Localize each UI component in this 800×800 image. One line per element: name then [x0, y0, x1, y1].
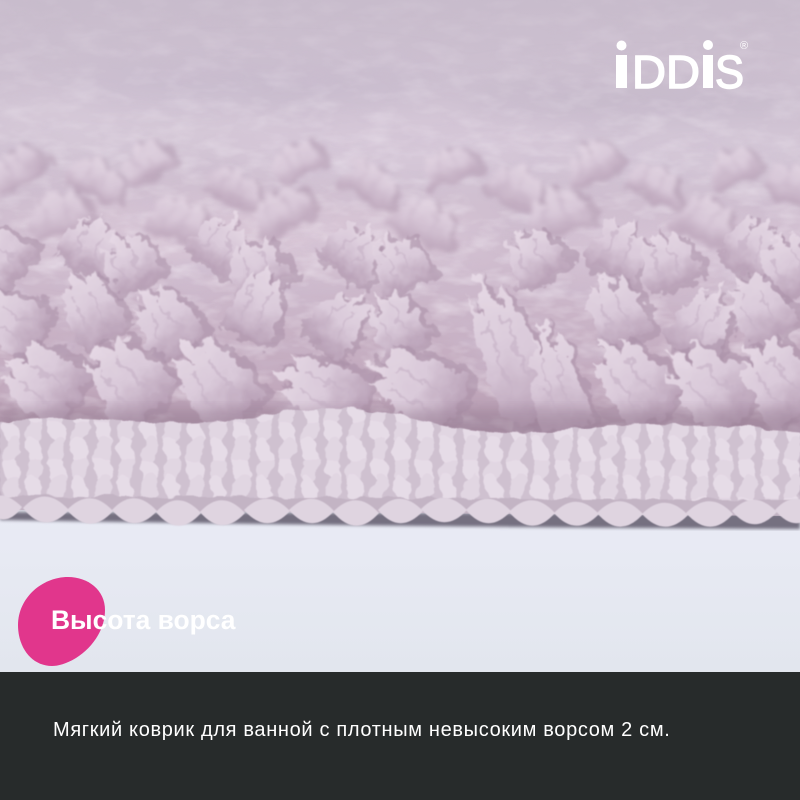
- stitched bead edge: [0, 496, 800, 527]
- description text: Мягкий коврик для ванной с плотным невысоким ворсом 2 см.: [53, 719, 670, 741]
- logo: IDDIS: [616, 40, 748, 92]
- heading: Высота ворса: [51, 605, 235, 635]
- woven rope border: [0, 408, 800, 516]
- soft fibre mottling: [0, 76, 800, 434]
- pile bottom shadow: [0, 410, 800, 440]
- logo: IDDIS: ®: [740, 40, 748, 52]
- footer bar: [0, 672, 800, 800]
- floor contact shadow: [0, 512, 800, 529]
- floor background: [0, 515, 800, 672]
- shag pile: [0, 0, 800, 446]
- pink blob badge: [18, 577, 105, 666]
- tufts, back to front: [0, 127, 800, 257]
